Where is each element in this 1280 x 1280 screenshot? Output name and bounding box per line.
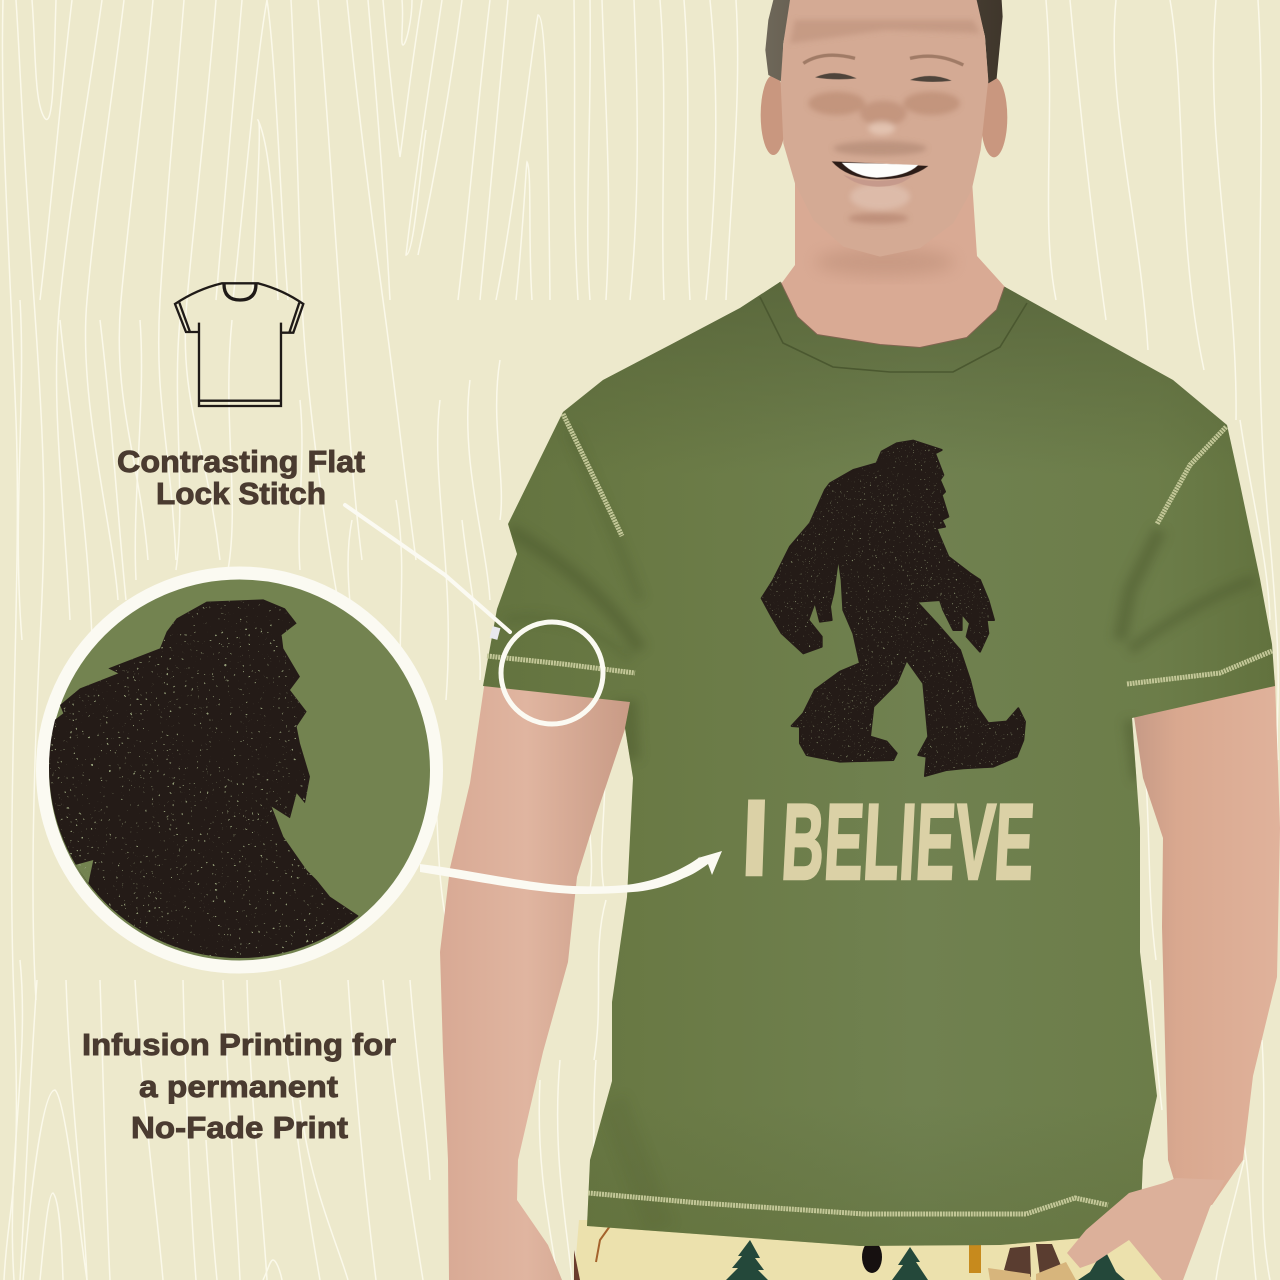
pants: button: [862, 1241, 882, 1273]
graphic: I BELIEVE lettering: [739, 777, 1037, 902]
text: infusion printing note: Infusion Printing for: [82, 1027, 396, 1062]
person: right arm: [1133, 680, 1280, 1205]
ear left: [761, 75, 786, 155]
pants: axe handle: [969, 1245, 981, 1273]
eyes: [815, 73, 952, 82]
callout: magnified print circle: [30, 570, 450, 980]
shirt folds and shading: [510, 529, 1251, 780]
face: [781, 0, 988, 257]
text: infusion printing note: [82, 1027, 396, 1145]
person: pants with forest print: [574, 1220, 1165, 1280]
graphic: bigfoot silhouette: [760, 440, 1026, 777]
person: t-shirt: [480, 280, 1280, 1250]
teeth: [842, 163, 918, 178]
arrow: print callout curved arrow: [420, 851, 722, 894]
pants: pine tree one: [726, 1240, 768, 1280]
magnified specks: [49, 600, 358, 957]
graphic: I BELIEVE lettering: I: [739, 777, 771, 898]
shirt stitching: [487, 414, 1272, 1214]
heading: contrasting flat lock stitch: Contrasting Flat: [117, 444, 365, 479]
arrow: stitch callout line: [345, 505, 510, 632]
shirt collar rib line: [760, 297, 1027, 372]
hair: [765, 0, 1003, 83]
magnified bigfoot silhouette: [49, 599, 359, 958]
person: neck: [780, 170, 1005, 370]
bigfoot distress specks: [762, 442, 1025, 774]
mouth: [832, 161, 928, 179]
ear right: [981, 77, 1007, 157]
lower lip: [843, 175, 913, 187]
face shading: [790, 20, 980, 224]
person: head: [761, 0, 1007, 257]
person: left arm: [440, 680, 632, 1280]
person: right hand in pocket: [1067, 1178, 1225, 1280]
pants: hair strands and bigfoot feet: [1004, 1244, 1062, 1277]
heading: contrasting flat lock stitch: Lock Stitch: [156, 476, 326, 511]
pants: tree near pocket: [1078, 1250, 1125, 1280]
text: infusion printing note: a permanent: [139, 1069, 338, 1104]
icon: t-shirt outline: [175, 283, 303, 406]
callout: small circle on sleeve stitch: [501, 622, 603, 724]
graphic: I BELIEVE lettering: BELIEVE: [779, 781, 1037, 902]
sleeve tag: [490, 626, 500, 640]
heading: contrasting flat lock stitch: [117, 444, 365, 511]
pants: pine tree two: [892, 1247, 928, 1280]
eyebrows: [803, 55, 963, 65]
text: infusion printing note: No-Fade Print: [131, 1110, 348, 1145]
